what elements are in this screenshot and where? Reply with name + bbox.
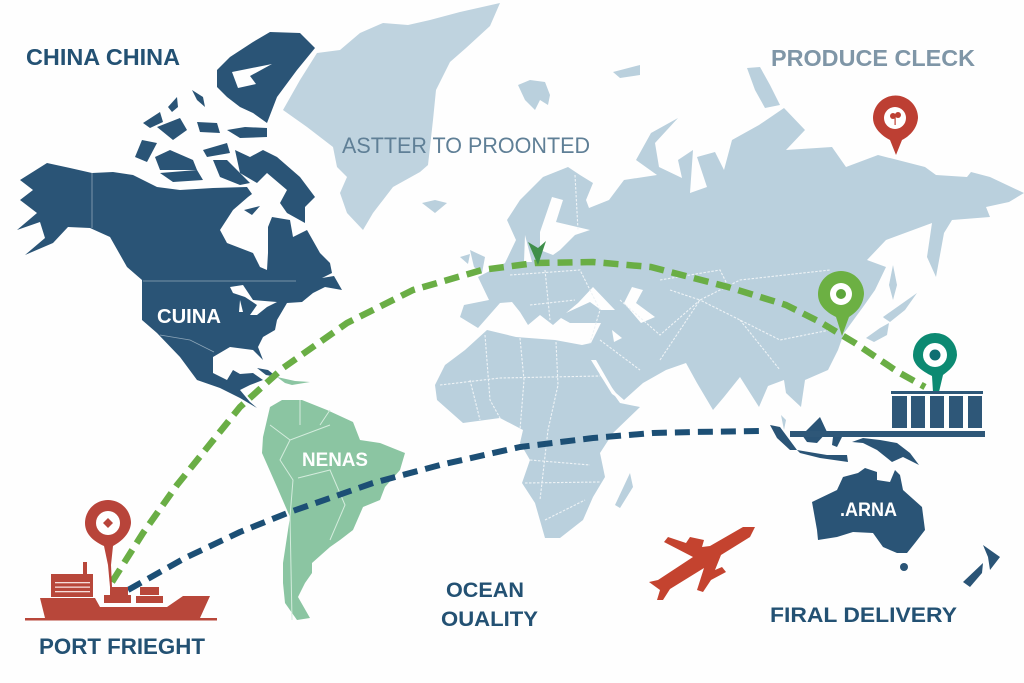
country borders [440,175,830,520]
ship [25,562,217,620]
label: Arna: .ARNA [840,500,897,521]
North America [17,32,342,408]
Great Lakes [230,64,277,315]
label: Ocean Quality: OCEAN [446,578,524,602]
pin: red Russia [873,96,918,155]
Africa [435,330,640,538]
route: navy arc [128,431,763,590]
South America [262,400,405,620]
inland seas [524,197,655,398]
Indonesia [770,417,919,465]
South America borders [270,400,345,620]
Eurasia [460,108,1024,410]
label: Ocean Quality [441,578,538,631]
pin: red ship [85,500,131,587]
New Zealand [963,545,1000,587]
route: green arc [112,262,925,582]
Islands in pale blue [422,65,917,508]
pin: green Europe [528,241,546,265]
label: Astter to Proonted: ASTTER TO PROONTED [342,133,590,158]
label: Produce Cleck: PRODUCE CLECK [771,45,975,71]
container stack [790,391,985,437]
Tasmania [900,563,908,571]
label: Port Frieght: PORT FRIEGHT [39,634,206,659]
icon: airplane [649,527,755,600]
Caribbean [277,377,310,385]
label: Cuina: CUINA [157,306,221,328]
Greenland [283,3,500,230]
label: Nenas: NENAS [302,449,368,471]
label: Firal Delivery: FIRAL DELIVERY [770,603,957,627]
pin: green China [818,271,864,336]
label: Ocean Quality: OUALITY [441,607,538,631]
Canada and US borders [92,173,296,352]
pin: teal container [913,333,957,392]
title: China China: CHINA CHINA [26,44,180,70]
Australia [812,468,925,553]
